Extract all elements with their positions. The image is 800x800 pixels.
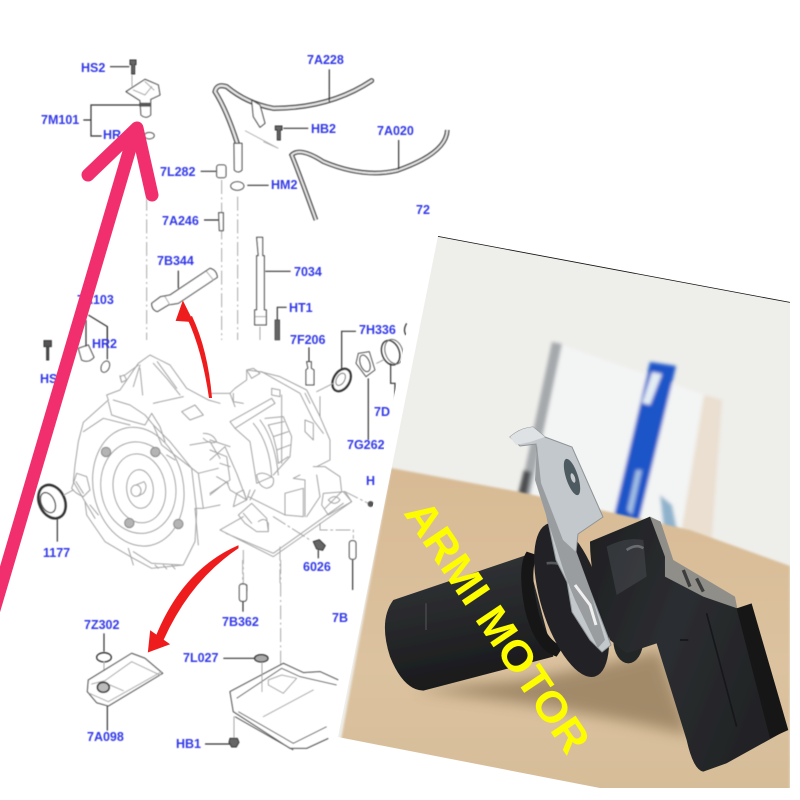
parts diagram [33, 60, 447, 750]
part labels: H [366, 474, 375, 488]
part labels: 7Z302 [84, 618, 119, 632]
transmission front bell housing [72, 355, 220, 569]
part labels: HR2 [92, 337, 117, 351]
dash-dot guide lines [147, 180, 260, 340]
part labels: 7A103 [77, 293, 114, 307]
part labels: 7F206 [290, 333, 325, 347]
pin 7B362 [239, 560, 281, 667]
part labels: 7034 [294, 265, 322, 279]
stud 7F206 and plug 6026 [240, 347, 374, 591]
part labels: 72 [416, 203, 430, 217]
part labels: HS2 [81, 61, 105, 75]
part labels [40, 53, 430, 751]
o-ring [521, 552, 563, 657]
photo of sensor [330, 230, 800, 800]
bolt HB2 [275, 126, 308, 140]
small parts left of transmission [44, 320, 111, 374]
lower parts [87, 560, 338, 750]
table surface [330, 468, 790, 800]
part labels: 6026 [303, 560, 331, 574]
small parts [201, 165, 269, 231]
pin 7B344 [152, 268, 217, 312]
part labels: 7A098 [87, 730, 124, 744]
blurred box [516, 342, 722, 560]
part labels: 7D [374, 405, 390, 419]
sensor part 7M101 [83, 60, 160, 139]
part labels: HM2 [271, 178, 297, 192]
watermark ARMI MOTOR: ARMI MOTOR [395, 492, 599, 762]
part labels: 7L282 [160, 165, 195, 179]
part labels: 7B [332, 611, 348, 625]
flange [534, 524, 610, 677]
part labels: 7A246 [162, 214, 199, 228]
filter 7A098 [87, 633, 163, 731]
connector [737, 603, 788, 738]
part labels: 7B362 [222, 615, 259, 629]
part labels: HR [103, 128, 121, 142]
red arrow to filter [149, 546, 238, 651]
metal bracket [510, 427, 611, 652]
tube 7A228 [215, 69, 372, 172]
part labels: 1177 [43, 546, 70, 560]
part labels: HT1 [289, 301, 313, 315]
part labels: HB1 [176, 737, 201, 751]
sensor body [385, 515, 788, 772]
part labels: HS [40, 372, 57, 386]
part labels: 7L027 [183, 651, 218, 665]
part labels: 7H336 [359, 323, 396, 337]
part labels: 7B344 [157, 254, 194, 268]
transmission rear housing and pan [210, 368, 368, 557]
seal 1177 [33, 481, 73, 542]
part labels: 7M101 [41, 113, 79, 127]
grey label strip [650, 517, 737, 608]
red arrow to pin [177, 303, 212, 398]
seals [317, 323, 407, 440]
pink arrow [0, 128, 152, 630]
table shadow [415, 650, 690, 735]
black top edge [438, 236, 790, 302]
cylinder [385, 555, 553, 691]
tube 7A020 [292, 130, 447, 220]
upper parts [83, 60, 447, 340]
elbow housing [590, 517, 787, 772]
wall [338, 237, 790, 757]
part labels: 7A020 [377, 124, 414, 138]
rod 7034 [88, 237, 291, 340]
part labels: 7G262 [347, 438, 385, 452]
oil pan [205, 655, 338, 750]
part labels: HB2 [311, 122, 336, 136]
part labels: 7A228 [307, 53, 344, 67]
